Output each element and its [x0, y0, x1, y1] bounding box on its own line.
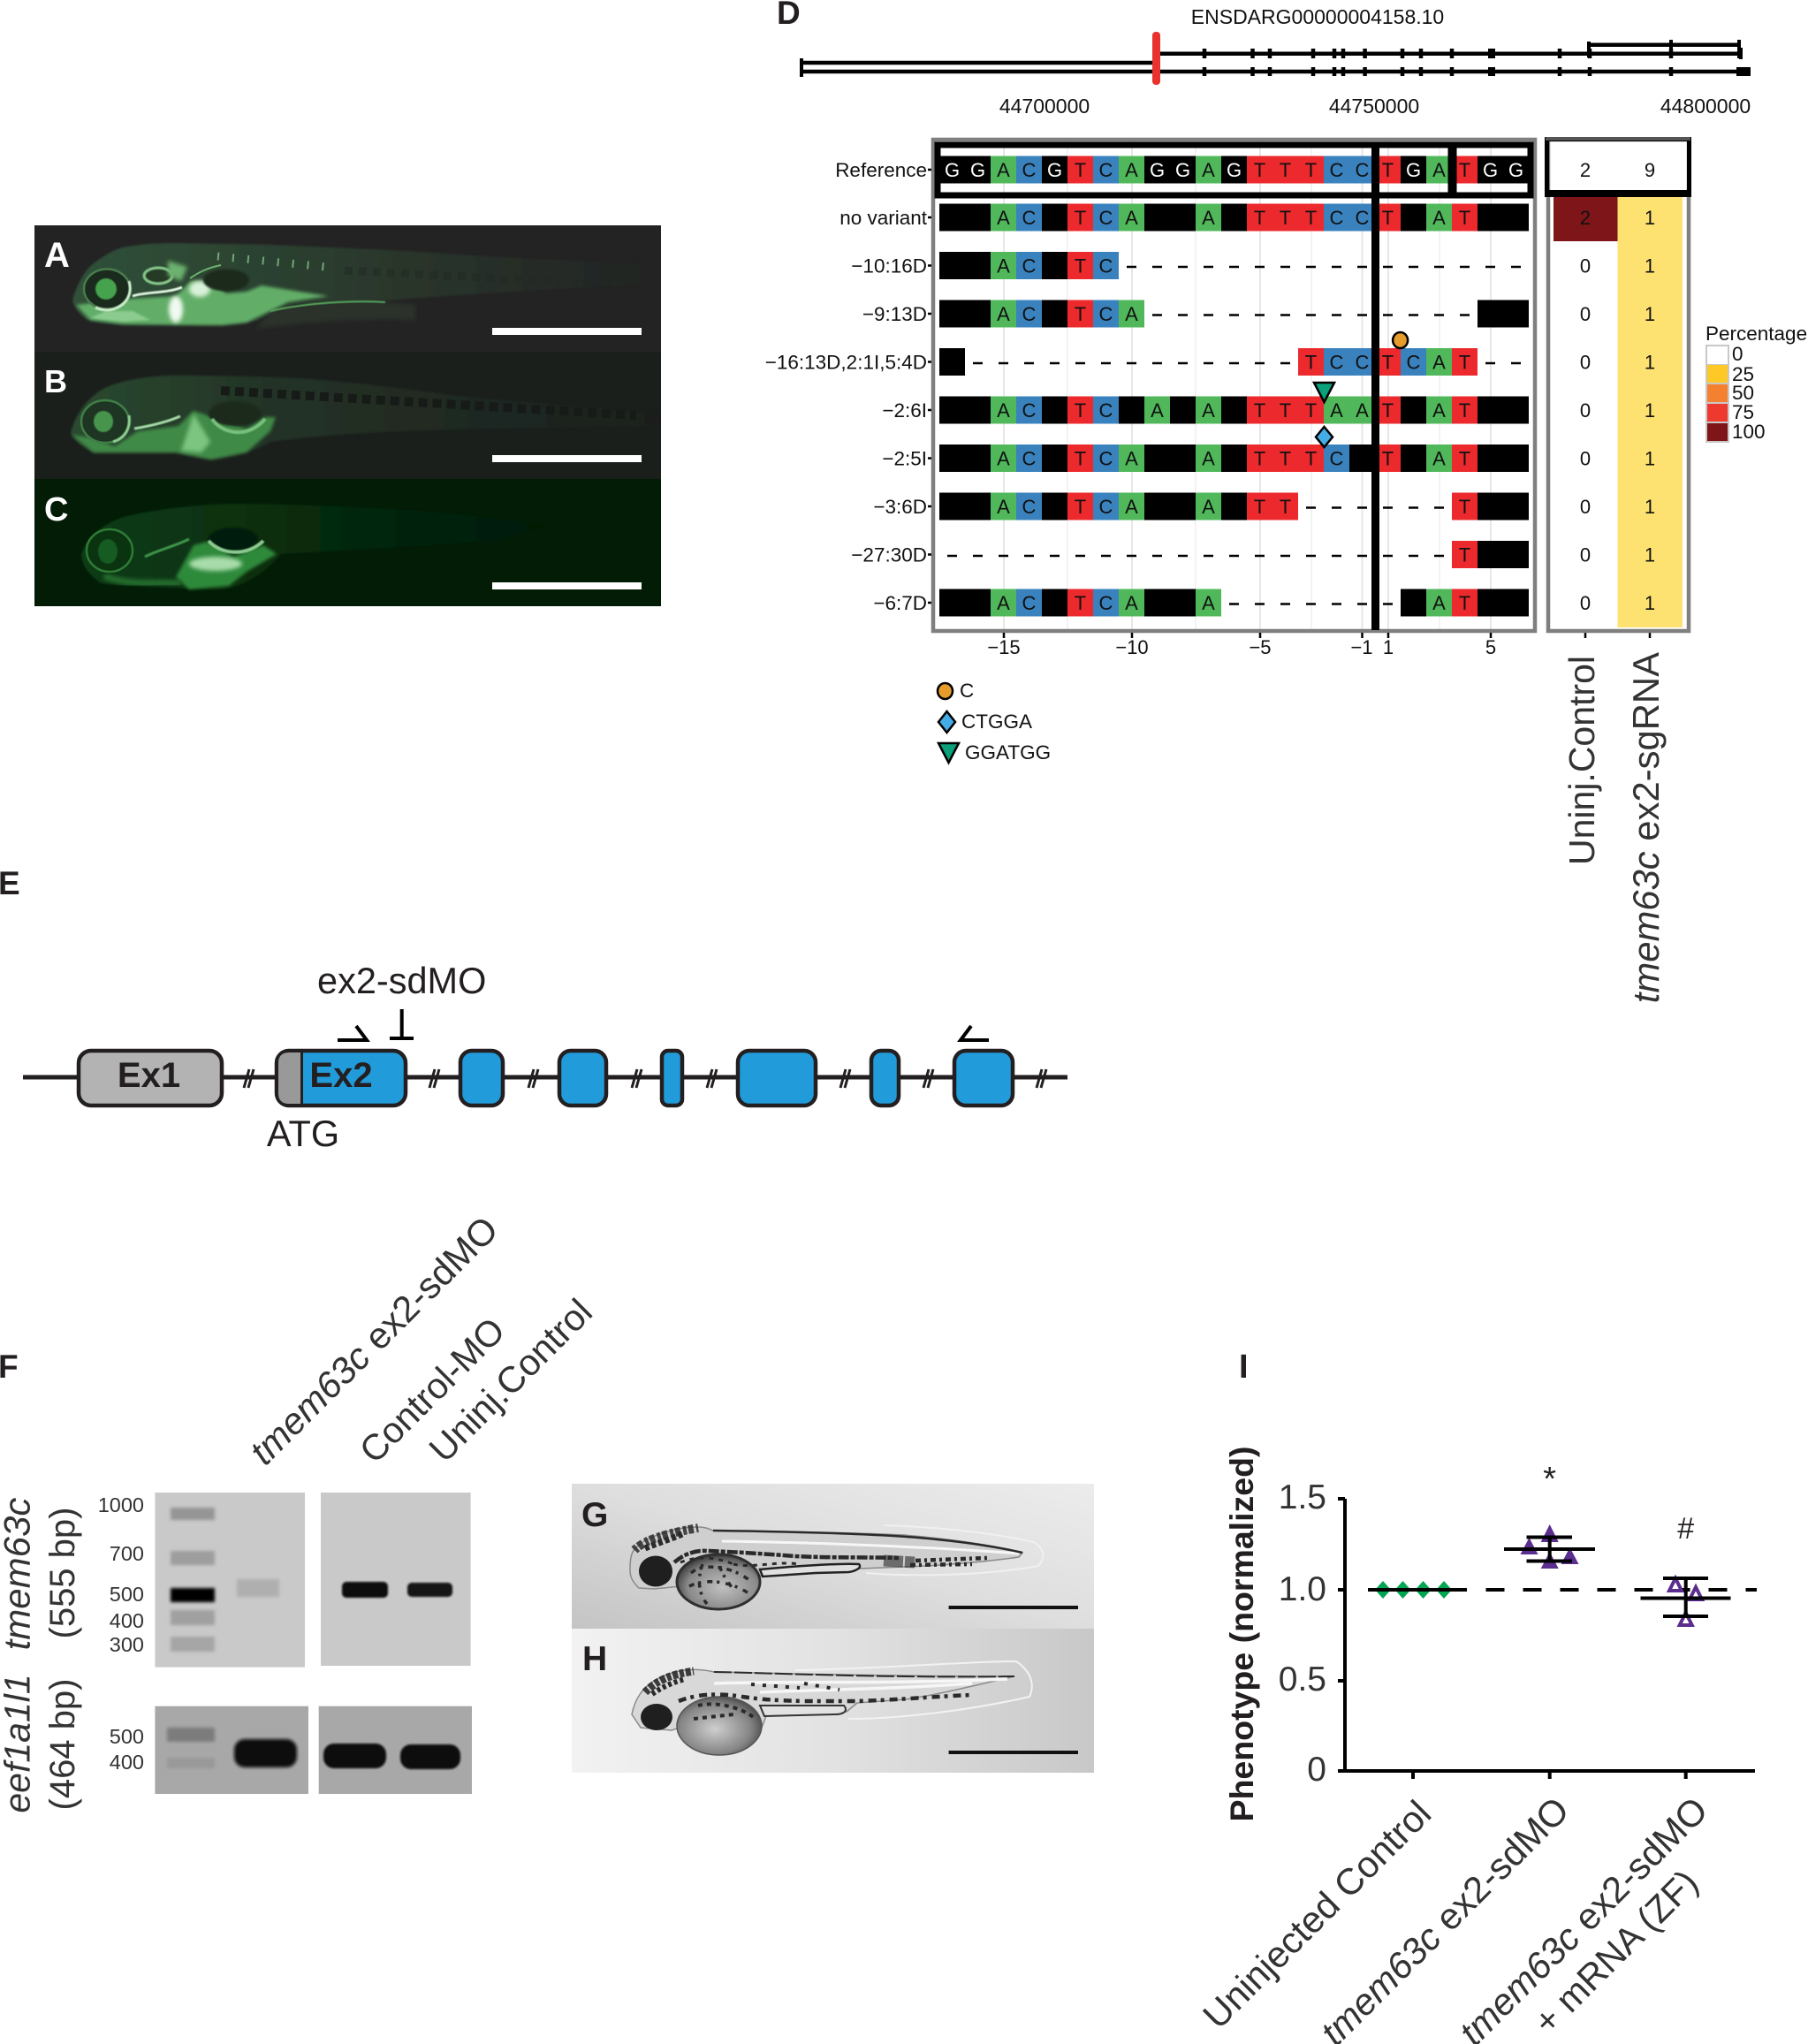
row labels: −6:7D — [873, 592, 927, 614]
panel: count heatmap: 1 — [1645, 303, 1655, 325]
y axis tick labels — [1279, 1478, 1326, 1789]
gel size markers: 500 — [110, 1725, 144, 1748]
row: no variant: C — [1356, 207, 1370, 229]
y axis tick labels: 1.5 — [1279, 1478, 1326, 1516]
panel: count heatmap: 1 — [1645, 496, 1655, 518]
cut site line — [1371, 142, 1379, 630]
row: -3:6D: C — [1099, 496, 1113, 518]
scale bar H — [949, 1751, 1078, 1754]
x axis ticks and labels: −15 — [987, 636, 1021, 658]
exons 3 to 8 — [460, 1051, 1013, 1106]
row labels: −2:6I — [882, 399, 927, 422]
row labels: −2:5I — [882, 447, 927, 470]
gel: tmem63c left — [155, 1493, 305, 1668]
row: no variant: T — [1382, 207, 1394, 229]
row: Reference: G — [1508, 159, 1523, 181]
row: -3:6D: T — [1280, 496, 1291, 518]
row: no variant: T — [1075, 207, 1086, 229]
panel: count heatmap: 1 — [1645, 399, 1655, 422]
row: -3:6D — [939, 493, 1529, 520]
legend: insertion symbols: CTGGA — [961, 710, 1032, 733]
row: -6:7D: C — [1099, 592, 1113, 614]
panel B — [34, 352, 661, 479]
row: Reference: T — [1382, 159, 1394, 181]
significance star: * — [1543, 1461, 1556, 1498]
target site marker — [1152, 32, 1160, 85]
gel: eef1a1l1 right — [319, 1706, 472, 1794]
row: no variant: C — [1330, 207, 1344, 229]
gridlines — [1004, 139, 1491, 632]
row: -2:6I: A — [1356, 399, 1369, 422]
legend: percentage: 75 — [1732, 401, 1754, 423]
panel A — [34, 225, 661, 352]
row: -2:5I: A — [1432, 447, 1446, 470]
row: -2:6I: A — [997, 399, 1010, 422]
panel: count heatmap: 1 — [1645, 447, 1655, 470]
exon 2: Ex2 — [309, 1056, 373, 1095]
row: -9:13D: T — [1075, 303, 1086, 325]
genomic coordinates — [999, 95, 1751, 118]
row: no variant: A — [1202, 207, 1215, 229]
group: uninjected control — [1368, 1581, 1467, 1599]
panel: count heatmap: 1 — [1645, 255, 1655, 277]
row: -2:6I: A — [1202, 399, 1215, 422]
row: -2:5I: T — [1305, 447, 1317, 470]
row: -2:5I — [939, 445, 1529, 472]
row: -2:6I: T — [1382, 399, 1394, 422]
legend: insertion symbols — [938, 680, 1051, 764]
gene model transcripts — [801, 40, 1751, 77]
row: -10:16D: T — [1075, 255, 1086, 277]
group: tmem63c ex2-sdMO — [1504, 1524, 1595, 1569]
panel: count heatmap — [1545, 137, 1691, 631]
row: -6:7D: T — [1075, 592, 1086, 614]
row: -9:13D: A — [1125, 303, 1138, 325]
reference highlight boxes — [938, 145, 1531, 195]
row: -2:5I: T — [1254, 447, 1265, 470]
panel: count heatmap: 0 — [1580, 592, 1591, 614]
insertion marker: CTGGA — [1316, 427, 1333, 447]
panel: count heatmap: 0 — [1580, 447, 1591, 470]
row: -9:13D: C — [1099, 303, 1113, 325]
row: no variant: T — [1305, 207, 1317, 229]
row: Reference: G — [1227, 159, 1242, 181]
row: Reference: T — [1075, 159, 1086, 181]
axes — [1338, 1499, 1755, 1779]
row: -2:6I: T — [1280, 399, 1291, 422]
x axis ticks and labels: −1 — [1350, 636, 1373, 658]
panel: count heatmap: 0 — [1580, 544, 1591, 566]
row: -9:13D: C — [1022, 303, 1037, 325]
heatmap column label: tmem63c ex2-sgRNA: tmem63c ex2-sgRNA — [1625, 652, 1667, 1003]
panel: fluorescent larvae A B C — [34, 225, 661, 606]
panel: count heatmap: 2 — [1580, 159, 1591, 181]
legend: percentage — [1705, 323, 1807, 443]
row: no variant — [939, 203, 1529, 232]
panel: variant alignment frame — [933, 140, 1535, 631]
row: Reference: G — [970, 159, 985, 181]
row: Reference: C — [1356, 159, 1370, 181]
row: -10:16D: C — [1022, 255, 1037, 277]
row labels: −3:6D — [873, 496, 927, 518]
y axis title: Phenotype (normalized) — [1223, 1446, 1260, 1822]
row: -2:6I: T — [1254, 399, 1265, 422]
genomic coordinates: 44700000 — [999, 95, 1090, 118]
row: Reference: G — [1175, 159, 1190, 181]
row: no variant: A — [1125, 207, 1138, 229]
panel: count heatmap: 0 — [1580, 352, 1591, 373]
row: -3:6D: T — [1254, 496, 1265, 518]
row: -27:30D: T — [1459, 544, 1470, 566]
gel lane labels: Uninj.Control — [421, 1291, 600, 1470]
row: Reference: G — [1406, 159, 1421, 181]
row labels: Reference — [835, 159, 927, 181]
row: -9:13D: A — [997, 303, 1010, 325]
insertion marker: C — [1393, 332, 1408, 348]
primer reverse — [961, 1026, 989, 1040]
scale bar A — [492, 328, 642, 335]
row: -16:13D,2:1I,5:4D: T — [1459, 352, 1470, 373]
row: no variant: C — [1022, 207, 1037, 229]
row: -27:30D — [947, 541, 1529, 568]
row: -6:7D: T — [1459, 592, 1470, 614]
significance hash: # — [1677, 1512, 1694, 1546]
row: Reference: C — [1099, 159, 1113, 181]
exon 1: Ex1 — [118, 1056, 180, 1095]
insertion marker: GGATGG — [1314, 383, 1334, 402]
panel: count heatmap: 0 — [1580, 255, 1591, 277]
row: Reference: G — [945, 159, 960, 181]
gel size markers: 400 — [110, 1609, 144, 1632]
panel: count heatmap: 1 — [1645, 207, 1655, 229]
genomic coordinates: 44750000 — [1329, 95, 1419, 118]
row: Reference: A — [1432, 159, 1446, 181]
row: -2:6I: C — [1022, 399, 1037, 422]
row: -10:16D: C — [1099, 255, 1113, 277]
panel: gene schematic — [23, 960, 1067, 1154]
row: -2:5I: C — [1022, 447, 1037, 470]
row: no variant: T — [1459, 207, 1470, 229]
row: -2:6I: A — [1432, 399, 1446, 422]
row: -3:6D: T — [1075, 496, 1086, 518]
row: no variant: C — [1099, 207, 1113, 229]
row labels: no variant — [839, 207, 928, 229]
legend: percentage: Percentage — [1705, 323, 1807, 345]
row: Reference: C — [1022, 159, 1037, 181]
legend: percentage: 50 — [1732, 382, 1754, 404]
panel: count heatmap: 2 — [1580, 207, 1591, 229]
row: Reference: T — [1305, 159, 1317, 181]
row: -3:6D: A — [1125, 496, 1138, 518]
gel side labels: (464 bp) — [43, 1679, 82, 1810]
letter H: H — [582, 1640, 607, 1678]
scale bar C — [492, 582, 642, 589]
group: rescue — [1640, 1578, 1730, 1625]
row: -2:5I: T — [1459, 447, 1470, 470]
row: -10:16D: A — [997, 255, 1010, 277]
label ex2-sdMO: ex2-sdMO — [317, 960, 486, 1001]
row: no variant: T — [1254, 207, 1265, 229]
gel size markers: 700 — [110, 1542, 144, 1565]
row: -6:7D: A — [1202, 592, 1215, 614]
row: -16:13D,2:1I,5:4D: C — [1407, 352, 1421, 373]
legend: insertion symbols: GGATGG — [965, 741, 1051, 764]
gel size markers: 300 — [110, 1633, 144, 1656]
row: Reference: C — [1330, 159, 1344, 181]
row: -6:7D: A — [997, 592, 1010, 614]
primer forward — [338, 1026, 367, 1040]
panel H: brightfield larva — [572, 1629, 1094, 1773]
gel size markers: 500 — [110, 1583, 144, 1606]
row: -3:6D: A — [1202, 496, 1215, 518]
row: -10:16D — [939, 252, 1525, 279]
row: -2:5I: A — [997, 447, 1010, 470]
row: -16:13D,2:1I,5:4D: A — [1432, 352, 1446, 373]
row labels: −9:13D — [862, 303, 927, 325]
x axis labels: Uninjected Control — [1195, 1792, 1439, 2037]
row: -2:6I — [939, 396, 1529, 424]
x axis ticks and labels: 1 — [1383, 636, 1394, 658]
legend: percentage: 0 — [1732, 343, 1743, 365]
title: transcript id: ENSDARG00000004158.10 — [1191, 5, 1444, 28]
row: -2:5I: A — [1125, 447, 1138, 470]
row: -2:5I: C — [1099, 447, 1113, 470]
gel: tmem63c right — [321, 1493, 471, 1666]
row: -16:13D,2:1I,5:4D: T — [1305, 352, 1317, 373]
legend: percentage: 25 — [1732, 363, 1754, 385]
row: -3:6D: T — [1459, 496, 1470, 518]
y axis tick labels: 1.0 — [1279, 1570, 1326, 1608]
gel side labels: (555 bp) — [43, 1508, 82, 1638]
y axis tick labels: 0 — [1307, 1751, 1326, 1789]
row: Reference: A — [997, 159, 1010, 181]
row: -16:13D,2:1I,5:4D — [939, 348, 1525, 376]
row: -2:5I: C — [1330, 447, 1344, 470]
row: Reference: A — [1125, 159, 1138, 181]
row: -2:6I: A — [1151, 399, 1164, 422]
letter B: B — [44, 363, 67, 399]
row: -2:6I: T — [1305, 399, 1317, 422]
letter C: C — [44, 491, 68, 528]
gel size markers: 400 — [110, 1751, 144, 1774]
row: no variant: A — [997, 207, 1010, 229]
legend: insertion symbols: C — [960, 680, 974, 702]
genomic coordinates: 44800000 — [1660, 95, 1751, 118]
row: Reference: G — [1047, 159, 1062, 181]
gel: eef1a1l1 left — [155, 1706, 308, 1794]
row: Reference — [939, 156, 1529, 184]
panel G: brightfield larva — [572, 1484, 1094, 1629]
row: -2:6I: T — [1075, 399, 1086, 422]
row labels: −27:30D — [851, 544, 927, 566]
panel: count heatmap: 0 — [1580, 496, 1591, 518]
x axis ticks and labels: −10 — [1115, 636, 1149, 658]
row labels: −16:13D,2:1I,5:4D — [765, 352, 927, 373]
panel: count heatmap: 1 — [1645, 352, 1655, 373]
panel: count heatmap: 0 — [1580, 399, 1591, 422]
letter A: A — [44, 236, 70, 275]
panel: count heatmap: 0 — [1580, 303, 1591, 325]
row: -6:7D — [939, 589, 1529, 617]
exon 1 — [79, 1051, 222, 1106]
row: -2:5I: T — [1382, 447, 1394, 470]
row: -3:6D: C — [1022, 496, 1037, 518]
row: -9:13D — [939, 300, 1529, 327]
label ATG: ATG — [267, 1113, 339, 1154]
morpholino target — [390, 1009, 414, 1038]
panel: phenotype scatter chart — [1195, 1446, 1757, 2044]
legend: percentage: 100 — [1732, 421, 1766, 443]
row: Reference: G — [1150, 159, 1165, 181]
row: Reference: G — [1483, 159, 1498, 181]
panel: count heatmap: 1 — [1645, 544, 1655, 566]
panel label I: I — [1239, 1349, 1249, 1386]
row: -2:5I: T — [1280, 447, 1291, 470]
intron breaks — [244, 1069, 1046, 1088]
gel size markers: 1000 — [98, 1493, 144, 1516]
scale bar B — [492, 455, 642, 462]
heatmap column label: Uninj.Control: Uninj.Control — [1561, 656, 1602, 865]
x axis labels — [1195, 1789, 1715, 2044]
row: -6:7D: C — [1022, 592, 1037, 614]
scale bar G — [949, 1606, 1078, 1609]
letter G: G — [581, 1496, 608, 1534]
gel side labels — [0, 1498, 82, 1813]
x axis ticks and labels: −5 — [1249, 636, 1272, 658]
reference dashed line — [1486, 1588, 1757, 1592]
row: -16:13D,2:1I,5:4D: C — [1356, 352, 1370, 373]
x axis ticks and labels — [987, 633, 1650, 658]
gel size markers — [98, 1493, 144, 1774]
gel lane labels: Control-MO — [352, 1310, 513, 1470]
row labels: −10:16D — [851, 255, 927, 277]
row: -2:6I: C — [1099, 399, 1113, 422]
row: -6:7D: A — [1432, 592, 1446, 614]
exon 2 — [277, 1051, 406, 1106]
panel: count heatmap: 1 — [1645, 592, 1655, 614]
row: Reference: T — [1280, 159, 1291, 181]
row labels — [765, 159, 931, 614]
row: Reference: A — [1202, 159, 1215, 181]
row: -16:13D,2:1I,5:4D: C — [1330, 352, 1344, 373]
row: Reference: T — [1254, 159, 1265, 181]
row: no variant: T — [1280, 207, 1291, 229]
row: no variant: A — [1432, 207, 1446, 229]
x axis labels: + mRNA (ZF) — [1525, 1862, 1705, 2042]
row: -2:5I: A — [1202, 447, 1215, 470]
y axis tick labels: 0.5 — [1279, 1660, 1326, 1698]
row: Reference: T — [1459, 159, 1470, 181]
row: -2:6I: A — [1330, 399, 1343, 422]
gel lane labels: tmem63c ex2-sdMO — [241, 1208, 505, 1472]
row: -3:6D: A — [997, 496, 1010, 518]
row: -6:7D: A — [1125, 592, 1138, 614]
x axis ticks and labels: 5 — [1485, 636, 1496, 658]
row: -2:6I: T — [1459, 399, 1470, 422]
panel: count heatmap: 9 — [1645, 159, 1655, 181]
panel C — [34, 479, 661, 606]
row: -16:13D,2:1I,5:4D: T — [1382, 352, 1394, 373]
row: -2:5I: T — [1075, 447, 1086, 470]
